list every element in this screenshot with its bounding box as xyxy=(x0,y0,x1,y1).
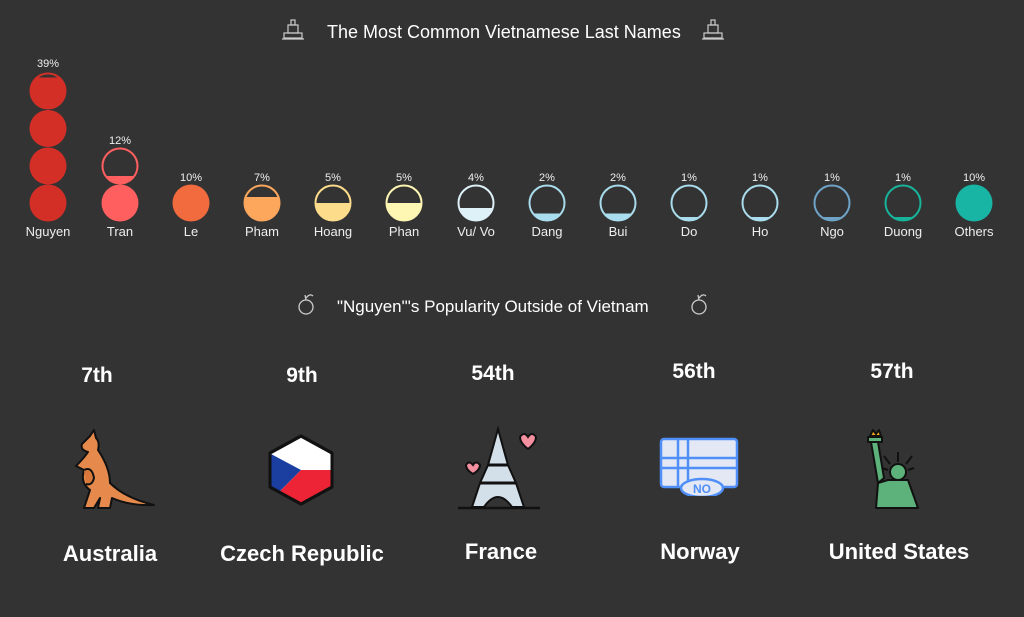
Duong xyxy=(886,186,920,220)
chart: name share circles: Vu/ Vo xyxy=(457,224,495,239)
ranks: 7th xyxy=(81,364,113,387)
text: Norway xyxy=(660,539,740,564)
chart: name share circles: Do xyxy=(681,224,697,239)
chart: name share circles: 12% xyxy=(109,135,131,147)
title: The Most Common Vietnamese Last Names xyxy=(327,22,681,42)
chart: name share circles: 10% xyxy=(963,172,985,184)
Hoang xyxy=(316,186,350,220)
chart: name share circles: 10% xyxy=(180,172,202,184)
chart: name share circles: 1% xyxy=(824,172,840,184)
icon: czech flag xyxy=(268,434,334,506)
chart: name share circles: 5% xyxy=(325,172,341,184)
icon: monument left xyxy=(282,20,304,39)
title xyxy=(282,19,724,42)
icon: kangaroo xyxy=(75,429,155,509)
Others xyxy=(956,184,992,222)
text: Czech Republic xyxy=(220,541,384,566)
subtitle xyxy=(298,294,707,316)
chart: name share circles: 2% xyxy=(610,172,626,184)
Do xyxy=(672,186,706,220)
icon: norway flag: NO xyxy=(693,482,711,496)
Nguyen xyxy=(30,74,66,222)
icon: globe-apple right xyxy=(692,295,706,314)
chart: name share circles: Nguyen xyxy=(26,224,70,239)
chart: name share circles: Phan xyxy=(389,224,419,239)
chart: name share circles: Dang xyxy=(531,224,563,239)
chart: name share circles: Tran xyxy=(107,224,133,239)
chart: name share circles: 2% xyxy=(539,172,555,184)
chart: name share circles: Duong xyxy=(884,224,922,239)
Le xyxy=(172,184,210,222)
chart: name share circles: Bui xyxy=(609,224,628,239)
chart: name share circles: 5% xyxy=(396,172,412,184)
Bui xyxy=(600,186,636,220)
chart: name share circles: 1% xyxy=(681,172,697,184)
chart: name share circles: 1% xyxy=(895,172,911,184)
text: France xyxy=(465,539,537,564)
Vu/Vo xyxy=(458,186,494,220)
Ngo xyxy=(814,186,850,220)
text: 54th xyxy=(471,362,515,385)
chart: name share circles: Hoang xyxy=(314,224,352,239)
chart: name share circles: Ho xyxy=(752,224,768,239)
chart: name share circles: Le xyxy=(184,224,198,239)
chart: name share circles: 7% xyxy=(254,172,270,184)
icon: eiffel tower xyxy=(458,426,540,510)
chart: name share circles: Others xyxy=(954,224,994,239)
icon: statue of liberty xyxy=(867,429,919,509)
text: 57th xyxy=(870,360,914,383)
Ho xyxy=(742,186,778,220)
Dang xyxy=(530,186,564,220)
country names: Australia xyxy=(63,541,157,566)
chart: name share circles: Pham xyxy=(245,224,279,239)
text: 9th xyxy=(286,364,318,387)
Phan xyxy=(386,186,422,220)
subtitle: "Nguyen"'s Popularity Outside of Vietnam xyxy=(337,297,649,316)
text: United States xyxy=(829,539,969,564)
text: 56th xyxy=(672,360,716,383)
Pham xyxy=(244,186,280,220)
Tran xyxy=(102,184,138,222)
chart: name share circles: 4% xyxy=(468,172,484,184)
icon: norway flag xyxy=(660,438,738,496)
icon: globe-apple left xyxy=(299,295,313,314)
chart: name share circles: Ngo xyxy=(820,224,844,239)
chart: name share circles: 1% xyxy=(752,172,768,184)
chart: name share circles xyxy=(26,58,994,239)
icon: monument right xyxy=(702,20,724,39)
chart: name share circles: 39% xyxy=(37,58,59,70)
